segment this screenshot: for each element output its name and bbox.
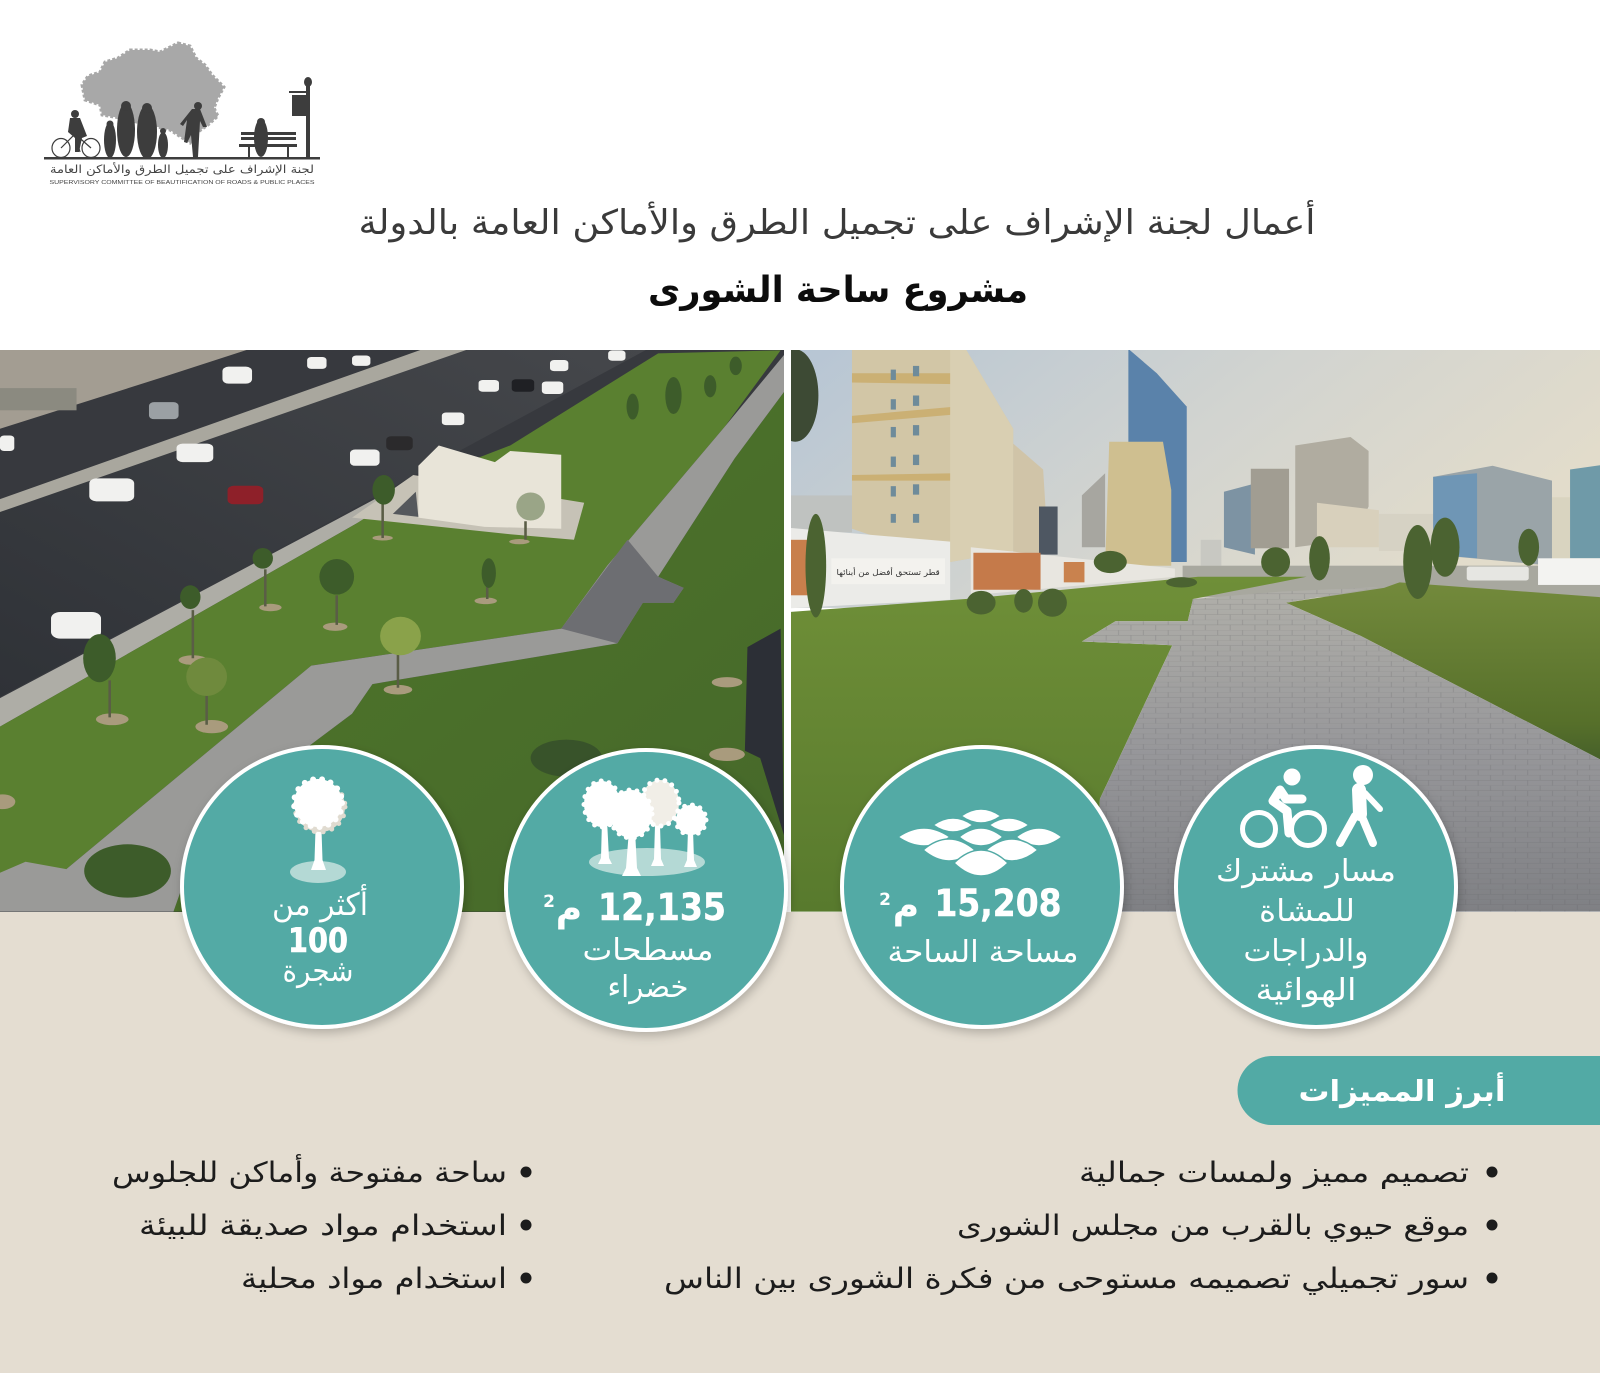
logo bicycle	[52, 134, 100, 158]
beige background panel	[0, 912, 1600, 1373]
far area top-left	[0, 349, 250, 429]
left lawn	[790, 577, 1307, 912]
beige building	[1105, 442, 1171, 566]
unit: square metres: م	[556, 889, 582, 930]
bullet 2: موقع حيوي بالقرب من مجلس الشورى	[957, 1209, 1469, 1242]
right lawn	[1286, 582, 1600, 760]
mural caption: قطر تستحق أفضل من أبنائها	[836, 567, 940, 577]
label line 2: للمشاة	[1259, 894, 1355, 929]
left photo: road and park	[0, 349, 786, 915]
circle background	[842, 747, 1122, 1027]
label: green: مسطحات	[582, 933, 714, 968]
near carriageway	[358, 350, 646, 448]
tall cream building	[852, 349, 1013, 562]
cars	[0, 350, 626, 639]
far left buildings	[790, 495, 852, 532]
project title: مشروع ساحة الشورى	[648, 270, 1028, 311]
icon: paving tiles	[898, 809, 1062, 876]
logo	[44, 43, 320, 186]
icon: pedestrian	[1340, 765, 1380, 843]
road-side sidewalk	[0, 499, 376, 726]
pavilion building	[418, 445, 561, 529]
logo silhouettes	[44, 77, 320, 160]
icon: group of trees	[584, 780, 706, 876]
heading pill: key features	[1238, 1056, 1600, 1125]
left tree	[791, 350, 818, 442]
circle: green areas 12,135 m2	[506, 750, 786, 1030]
number 100: 100	[288, 921, 348, 961]
bullet 1: ساحة مفتوحة وأماكن للجلوس	[112, 1153, 507, 1189]
logo tree crown	[82, 43, 224, 143]
logo Arabic name: لجنة الإشراف على تجميل الطرق والأماكن العامة	[50, 162, 314, 177]
skyline right	[1224, 484, 1255, 555]
logo English name: SUPERVISORY COMMITTEE OF BEAUTIFICATION OF ROADS & PUBLIC PLACES	[50, 180, 315, 186]
feature list: right column	[664, 1156, 1498, 1295]
shrubs and trees	[805, 514, 1539, 618]
circle: shared path for pedestrians and scooters	[1176, 747, 1456, 1027]
median	[0, 349, 469, 512]
label line 3: والدراجات	[1244, 934, 1368, 969]
circle background	[182, 747, 462, 1027]
blue tower	[1128, 349, 1187, 562]
walkway	[0, 355, 784, 912]
bullet 2: استخدام مواد صديقة للبيئة	[139, 1209, 507, 1242]
number 15,208: 15,208	[934, 882, 1062, 925]
label: areas: خضراء	[608, 970, 688, 1005]
main lawn	[0, 350, 781, 876]
circle: plaza area 15,208 m2	[842, 747, 1122, 1027]
unit: square metres	[543, 889, 582, 930]
hoarding walls	[790, 528, 950, 608]
icon: single tree	[290, 779, 346, 883]
paved path	[1082, 587, 1600, 912]
label line 4: الهوائية	[1256, 973, 1356, 1008]
heading text: أبرز المميزات	[1298, 1072, 1506, 1108]
unit: square metres: م	[893, 886, 919, 927]
unit: square metres: 2	[879, 890, 891, 910]
label line 1: مسار مشترك	[1216, 854, 1396, 889]
number 12,135: 12,135	[598, 886, 726, 929]
feature list: left column	[112, 1153, 532, 1295]
plaza	[352, 475, 584, 540]
label: more than: أكثر من	[272, 884, 368, 923]
street band	[1183, 566, 1600, 597]
right lawn	[173, 392, 784, 912]
title line: أعمال لجنة الإشراف على تجميل الطرق والأماكن العامة بالدولة	[358, 200, 1316, 243]
label: tree: شجرة	[282, 954, 354, 989]
unit: square metres	[879, 886, 919, 927]
label: plaza area: مساحة الساحة	[888, 935, 1078, 970]
tree pits	[0, 535, 745, 809]
bullet 1: تصميم مميز ولمسات جمالية	[1079, 1156, 1469, 1189]
circle background	[1176, 747, 1456, 1027]
unit: square metres: 2	[543, 892, 555, 912]
bus	[1538, 558, 1600, 585]
icon: cyclist	[1242, 768, 1324, 846]
circle background	[506, 750, 786, 1030]
bullet 3: استخدام مواد محلية	[241, 1262, 507, 1295]
dark building edge	[745, 629, 784, 836]
trees	[110, 499, 526, 725]
right photo: plaza walkway and skyline	[772, 349, 1600, 912]
circle: more than 100 trees	[182, 747, 462, 1027]
bullet 3: سور تجميلي تصميمه مستوحى من فكرة الشورى بين الناس	[664, 1262, 1469, 1295]
